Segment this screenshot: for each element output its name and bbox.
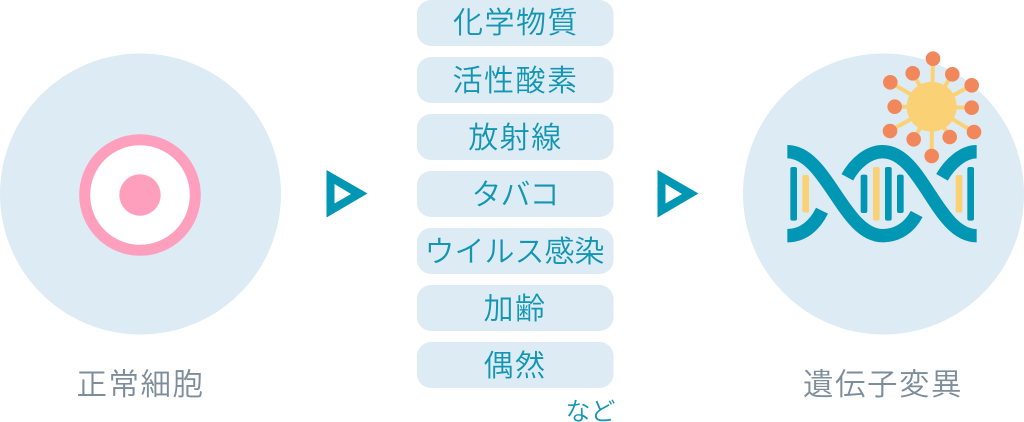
icon: cell [85,140,195,250]
cause: chemicals: 化学物質 [453,7,579,40]
panel: gene mutation [743,51,1024,402]
cause: chance [417,342,614,388]
cause: tobacco: タバコ [472,179,558,212]
label: gene mutation: 遺伝子変異 [803,368,963,402]
cause: aging: 加齢 [484,293,546,326]
cause: tobacco [417,171,614,217]
background circle: normal cell [0,54,281,334]
background circle: gene mutation [743,54,1024,334]
cause: reactive oxygen [417,57,614,103]
cause: chemicals [417,0,614,46]
cause: viral infection [417,228,614,274]
panel: causes list [417,0,616,422]
arrow: normal cell to causes [326,170,368,218]
icon: DNA helix [787,152,977,236]
cause: aging [417,285,614,331]
icon: virus [883,51,981,163]
panel: normal cell [0,54,281,402]
cause: reactive oxygen: 活性酸素 [452,65,578,98]
label: normal cell: 正常細胞 [76,368,204,402]
cause: viral infection: ウイルス感染 [424,236,604,269]
cause: chance: 偶然 [484,350,546,383]
cause: radiation [417,114,614,160]
arrow: causes to mutation [658,170,698,218]
cause: radiation: 放射線 [468,122,563,155]
